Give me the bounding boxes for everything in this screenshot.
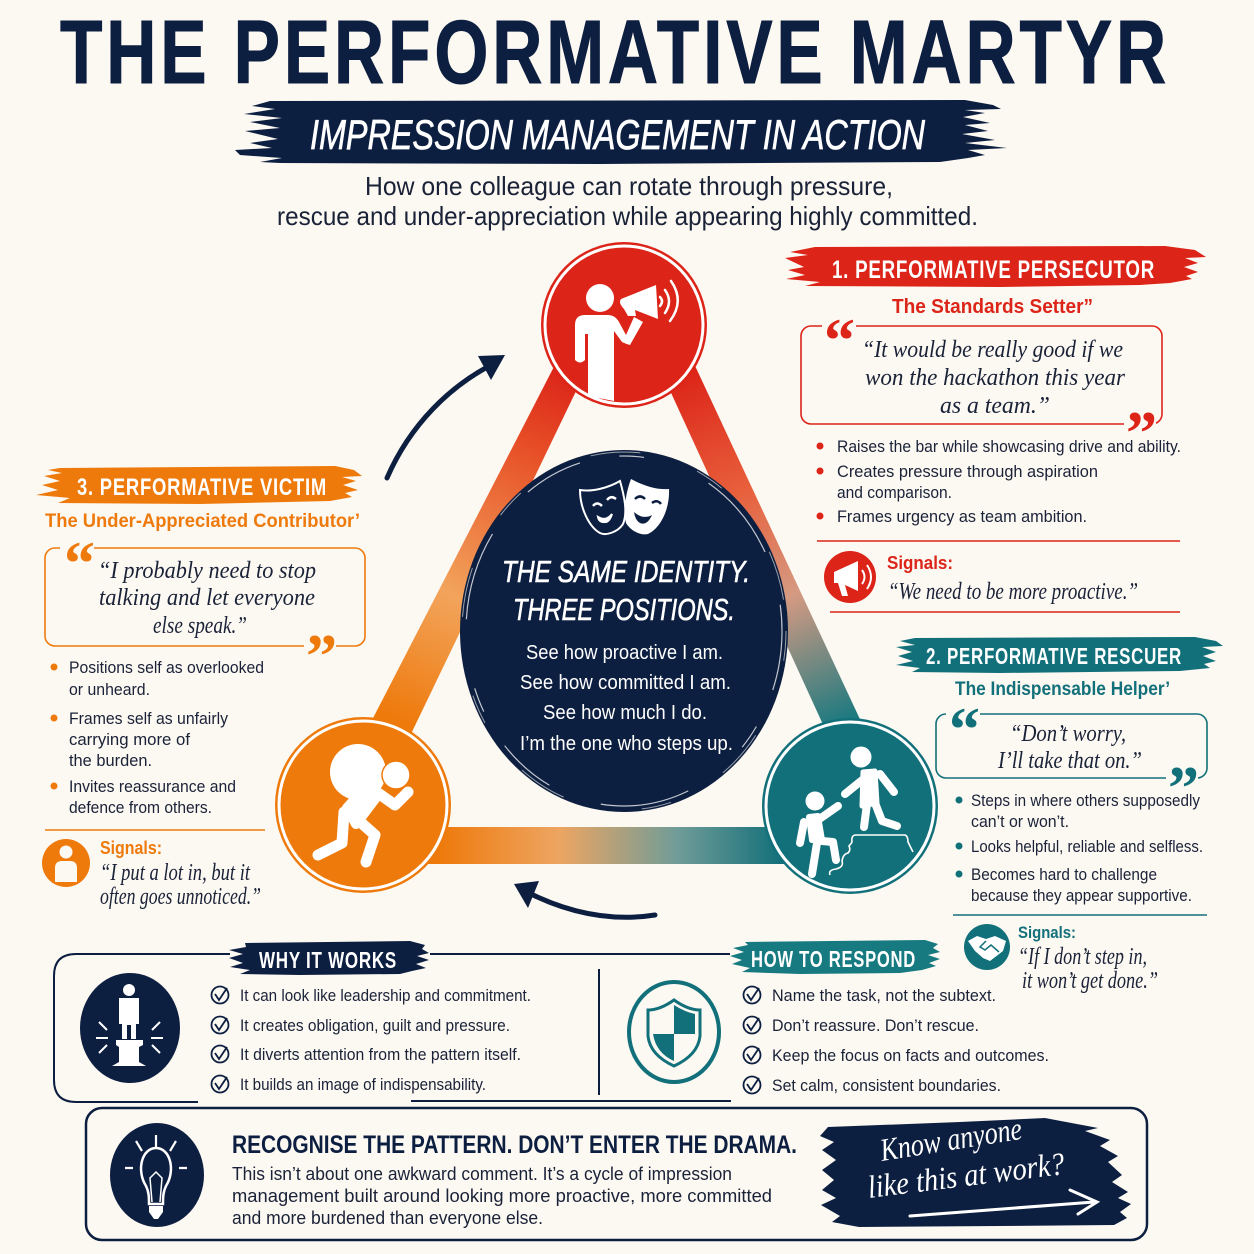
quote box: “It would be really good if we [862,337,1123,363]
bullet list: Steps in where others supposedly [971,791,1200,810]
icon: rescuer circle [762,718,938,894]
panel: persecutor [785,246,1206,612]
triangle cycle bars [336,355,893,864]
quote box: “ [64,530,95,598]
heading banner: persecutor [785,246,1206,287]
bullet list: Looks helpful, reliable and selfless. [971,837,1203,856]
icon: shield [629,982,719,1082]
banner body [232,1164,772,1228]
signals: “If I don’t step in, [1018,944,1147,970]
signals: “I put a lot in, but it [100,860,251,886]
panel: rescuer [896,637,1223,994]
quote box: “ [949,696,980,764]
bullet list: Frames urgency as team ambition. [837,507,1087,526]
bullet list: Invites reassurance and [69,777,236,796]
icon: persecutor circle [541,242,707,408]
subtitle banner [235,100,1007,164]
call to action: Know anyone [877,1110,1024,1168]
bullet list: Frames self as unfairly [69,709,228,728]
bullet list [956,791,1203,905]
heading: how to respond [730,940,940,974]
quote box: talking and let everyone [99,585,315,611]
centre lines: See how much I do. [543,702,707,724]
banner heading: RECOGNISE THE PATTERN. DON’T ENTER THE DRAMA. [232,1131,797,1159]
signals: it won’t get done.” [1022,968,1158,994]
quote box: won the hackathon this year [865,365,1126,391]
icon: megaphone [824,551,876,603]
intro text: rescue and under-appreciation while appearing highly committed. [277,201,978,231]
bullet list: and comparison. [837,483,952,502]
quote box [45,530,365,691]
quote box: “I probably need to stop [98,558,316,584]
quote box: “Don’t worry, [1010,721,1126,747]
signals: often goes unnoticed.” [100,884,261,910]
centre heading [502,554,750,627]
call to action: like this at work? [865,1145,1066,1205]
call to action [820,1110,1131,1227]
list: why it works: It builds an image of indispensability. [240,1075,486,1094]
role name: The Under-Appreciated Contributor’ [45,511,360,532]
list: how to respond: Set calm, consistent boundaries. [772,1076,1001,1095]
quote box: ” [306,623,337,691]
centre lines: See how proactive I am. [526,642,723,664]
icon: person [42,839,90,887]
centre heading: THREE POSITIONS. [513,592,735,627]
panel: bottom banner [86,1108,1147,1240]
bullet list: Creates pressure through aspiration [837,462,1098,481]
quote box: else speak.” [153,613,247,639]
heading: how to respond: HOW TO RESPOND [751,946,916,972]
role name: The Indispensable Helper’ [955,679,1170,700]
signals [100,838,261,910]
bullet list: because they appear supportive. [971,886,1192,905]
icon: person on pedestal [80,973,180,1083]
bullet list [816,437,1181,526]
bullet list: defence from others. [69,798,212,817]
intro text: How one colleague can rotate through pressure, [365,171,893,201]
list: how to respond [744,986,1049,1095]
list: why it works: It diverts attention from the pattern itself. [240,1045,521,1064]
quote box: I’ll take that on.” [997,748,1142,774]
quote box [936,696,1207,823]
list: how to respond: Keep the focus on facts and outcomes. [772,1046,1049,1065]
list: why it works [212,986,531,1094]
arrow: victim to persecutor [387,355,505,478]
bullet list: Raises the bar while showcasing drive and ability. [837,437,1181,456]
heading banner: rescuer [896,637,1223,673]
heading banner: persecutor: 1. PERFORMATIVE PERSECUTOR [832,256,1155,284]
role name: The Standards Setter” [892,296,1093,318]
icon: light bulb [110,1123,204,1227]
banner body: This isn’t about one awkward comment. It’s a cycle of impression [232,1164,732,1184]
signals [1018,923,1158,994]
quote box: “ [824,307,855,375]
heading: why it works [229,941,429,975]
list: why it works: It creates obligation, guilt and pressure. [240,1016,510,1035]
bullet list: Positions self as overlooked [69,658,264,677]
quote box: ” [1126,400,1157,468]
banner body: and more burdened than everyone else. [232,1208,543,1228]
list: why it works: It can look like leadership and commitment. [240,986,531,1005]
centre heading: THE SAME IDENTITY. [502,554,750,589]
centre lines: See how committed I am. [520,672,731,694]
quote box: as a team.” [940,393,1050,419]
list: how to respond: Name the task, not the subtext. [772,986,996,1005]
heading: why it works: WHY IT WORKS [259,947,397,973]
quote box: ” [1168,755,1199,823]
bullet list: the burden. [69,751,152,770]
subtitle banner: IMPRESSION MANAGEMENT IN ACTION [310,111,926,158]
intro text [277,171,978,231]
signals: “We need to be more proactive.” [888,579,1138,605]
bullet list: Becomes hard to challenge [971,865,1157,884]
centre lines: I’m the one who steps up. [520,733,733,755]
icon: victim circle [275,717,451,893]
panel: victim [36,466,365,910]
signals: Signals: [100,838,162,858]
signals: Signals: [887,553,953,573]
centre circle [460,450,788,812]
heading banner: victim: 3. PERFORMATIVE VICTIM [77,474,327,501]
signals [887,553,1138,605]
panel: why it works and how to respond [54,940,1049,1102]
list: how to respond: Don’t reassure. Don’t rescue. [772,1016,979,1035]
quote box [801,307,1162,468]
bullet list [50,658,264,817]
bullet list: can’t or won’t. [971,812,1069,831]
arrow: rescuer to victim [514,881,655,917]
bullet list: or unheard. [69,680,150,699]
bullet list: carrying more of [69,730,190,749]
banner body: management built around looking more proactive, more committed [232,1186,772,1206]
signals: Signals: [1018,923,1076,942]
icon: handshake [964,924,1010,970]
icon: theatre masks [580,479,669,534]
centre lines [520,642,733,755]
heading banner: victim [36,466,362,504]
